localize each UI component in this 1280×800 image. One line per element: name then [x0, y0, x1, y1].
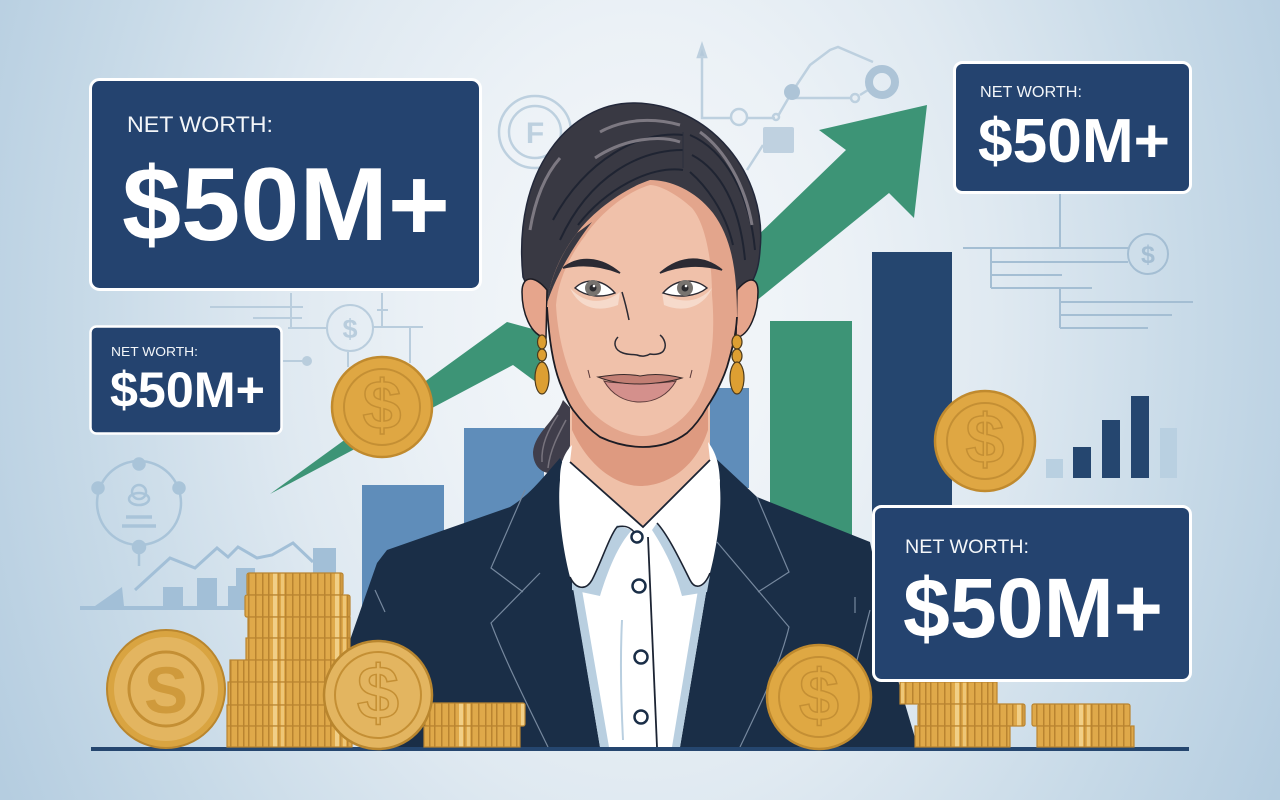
callout: lower right [874, 506, 1190, 680]
figure: hair [522, 103, 761, 305]
figure: face [530, 120, 755, 447]
coin stack: left [227, 573, 352, 747]
coin stack: centre [424, 703, 525, 747]
figure: suit jacket [349, 453, 918, 748]
line diagram: top centre: F [526, 117, 544, 150]
face: hair strands [530, 120, 755, 260]
callout: top right: NET WORTH: [980, 84, 1082, 101]
line diagram: left centre [210, 293, 423, 367]
line diagram: top centre [499, 45, 895, 170]
callout: large top left: NET WORTH: [127, 112, 273, 137]
callout: lower right: NET WORTH: [905, 537, 1029, 558]
face: nose [615, 292, 665, 356]
network icon: lock [92, 458, 184, 566]
figure: white shirt and collar [559, 442, 720, 747]
coin: centre right [767, 645, 871, 749]
coin: right: $ [966, 400, 1004, 478]
callout: large top left: $50M+ [122, 147, 450, 263]
callout: top right [954, 62, 1190, 192]
face: eyes [575, 281, 707, 296]
coin: right [935, 391, 1035, 491]
mini line and bar chart [80, 543, 336, 610]
baseline [91, 747, 1189, 751]
coin: upper left: $ [363, 366, 401, 444]
callout: lower right: $50M+ [903, 561, 1163, 655]
line diagram: upper right [963, 193, 1193, 328]
line diagram: upper right: $ [1141, 241, 1155, 269]
small bar chart right [1046, 396, 1177, 478]
coin: large left [107, 630, 225, 748]
callout: small left: NET WORTH: [111, 344, 198, 359]
coin stack: far right [1032, 704, 1134, 747]
face: eye shadows [570, 288, 712, 309]
coin: centre left [324, 641, 432, 749]
bar chart: rising bars [362, 252, 952, 625]
arrow: green growth trend [270, 105, 927, 494]
coin: upper left [332, 357, 432, 457]
face: eyebrows [563, 259, 722, 273]
callout: small left: $50M+ [110, 362, 265, 418]
callout: top right: $50M+ [978, 107, 1170, 176]
face: lips [604, 381, 676, 402]
figure: earrings [535, 335, 744, 394]
coin stack: right [900, 682, 1025, 747]
line diagram: left centre: $ [342, 314, 358, 344]
callout: large top left [90, 80, 480, 290]
ponytail [533, 400, 577, 473]
coin: large left: S [144, 653, 188, 727]
callout: small left [90, 326, 282, 434]
coin: centre right: $ [799, 656, 839, 736]
figure: ears [522, 279, 758, 338]
coin: centre left: $ [357, 651, 399, 736]
figure: neck [570, 395, 710, 527]
